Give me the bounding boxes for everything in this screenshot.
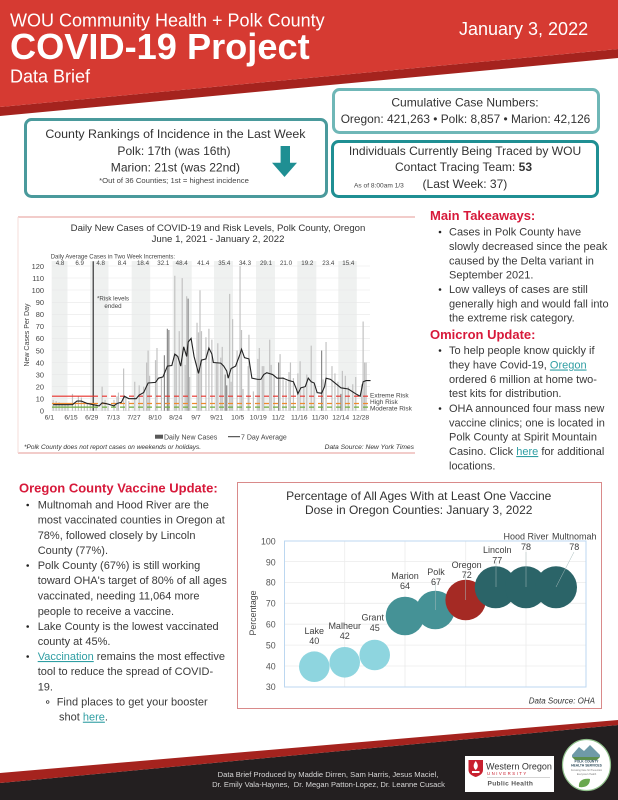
- panel: contact tracing: As of 8:00am 1/3: [354, 183, 404, 190]
- y axis: 120: [32, 262, 44, 271]
- panel: main takeaways: the extreme risk category.: [449, 313, 575, 325]
- panel: oregon county vaccine update: 19.: [38, 682, 53, 694]
- logo: western oregon university public health: UNIVERSITY: [487, 771, 528, 776]
- chart data source: Data Source: New York Times: [325, 444, 415, 451]
- header title block: [10, 11, 325, 87]
- panel: contact tracing: Contact Tracing Team: 53: [395, 160, 532, 174]
- panel: oregon county vaccine update: [19, 480, 227, 724]
- y axis: percentage: 40: [266, 662, 276, 672]
- two week average labels: [51, 254, 355, 267]
- panel: oregon county vaccine update: tool to reduce the spread of COVID-: [38, 666, 214, 678]
- panel: contact tracing: Individuals Currently Being Traced by WOU: [349, 144, 581, 158]
- panel: main takeaways: [430, 208, 609, 472]
- panel: main takeaways: OHA announced four mass new: [449, 403, 604, 415]
- two week average labels: 35.4: [218, 260, 231, 267]
- x axis: 6/15: [64, 414, 78, 421]
- heading: omicron update: Omicron Update:: [430, 327, 535, 342]
- two week average labels: 23.4: [322, 260, 335, 267]
- panel: oregon county vaccine update: toward OHA's target of 80% of all ages: [38, 575, 227, 587]
- x axis: 11/2: [272, 414, 285, 421]
- panel: main takeaways: generally high and would fall into: [449, 298, 609, 310]
- risk level labels: Moderate Risk: [370, 405, 413, 412]
- panel: main takeaways: test kits for distribution.: [449, 388, 562, 400]
- x axis: 9/21: [210, 414, 224, 421]
- panel: oregon county vaccine update: Vaccination remains the most effective: [38, 651, 225, 663]
- panel: cumulative case numbers: [334, 90, 598, 132]
- chart legend: 7 Day Average: [241, 434, 287, 442]
- panel: main takeaways: Low valleys of cases are still: [449, 284, 588, 296]
- panel: main takeaways: Polk County at Spirit Mountain: [449, 432, 597, 444]
- vaccine chart title: Percentage of All Ages With at Least One Vaccine: [286, 489, 552, 503]
- risk level labels: [370, 392, 413, 412]
- bubble labels: Polk: [427, 567, 445, 577]
- logo: polk county health services: HEALTH SERVICES: [571, 764, 603, 768]
- bubble labels: 42: [340, 631, 350, 641]
- logo: polk county health services: [562, 740, 610, 790]
- x axis: 12/14: [332, 414, 349, 421]
- panel: main takeaways: vaccine clinics; one is located in: [449, 417, 605, 429]
- vaccine data source: Data Source: OHA: [529, 696, 595, 706]
- panel: main takeaways: ordered 6 million at home two-: [449, 374, 597, 386]
- x axis: 10/5: [231, 414, 245, 421]
- panel: main takeaways: To help people know quickly if: [449, 345, 595, 357]
- risk level lines: [52, 396, 368, 407]
- panel: contact tracing: [332, 142, 598, 196]
- logo: polk county health services: Everyone's Health: [577, 773, 597, 776]
- x axis: 8/24: [169, 414, 183, 421]
- bubble labels: Hood River: [503, 532, 549, 542]
- panel: oregon county vaccine update: 78%, followed closely by Lincoln: [38, 530, 195, 542]
- two week average labels: 29.1: [260, 260, 273, 267]
- y axis: 60: [36, 334, 44, 343]
- panel: main takeaways: September 2021.: [449, 270, 533, 282]
- bubble labels: Marion: [391, 571, 419, 581]
- y axis: 0: [40, 407, 44, 416]
- panel: main takeaways: Casino. Click here for additional: [449, 446, 604, 458]
- panel: oregon county vaccine update: county at 45%.: [38, 636, 110, 648]
- panel: main takeaways: Cases in Polk County have: [449, 227, 581, 239]
- y axis: 10: [36, 394, 44, 404]
- annotation: risk levels ended: ended: [104, 303, 122, 310]
- chart title: June 1, 2021 - January 2, 2022: [152, 234, 284, 245]
- x axis: 12/28: [352, 414, 369, 421]
- panel: oregon county vaccine update: Find places to get your booster: [57, 697, 208, 709]
- bubbles: [299, 566, 577, 682]
- panel: contact tracing: (Last Week: 37): [422, 177, 507, 191]
- bubble labels: Lincoln: [483, 545, 512, 555]
- logo: western oregon university public health: Public Health: [488, 781, 533, 788]
- y axis: 30: [36, 370, 44, 380]
- bubble labels: 45: [370, 623, 380, 633]
- y axis: 70: [36, 322, 44, 331]
- y axis: 90: [36, 298, 44, 307]
- chart title: [71, 223, 365, 245]
- icon: down arrow: [272, 146, 297, 177]
- bubble labels: 64: [400, 581, 410, 591]
- two week average labels: 8.4: [118, 260, 127, 267]
- y axis: 40: [36, 358, 44, 368]
- two week average labels: 18.4: [137, 260, 150, 267]
- header title block: WOU Community Health + Polk County: [10, 11, 325, 31]
- header banner: [0, 0, 618, 116]
- two week average labels: 41.4: [197, 260, 210, 267]
- bubble labels: 72: [462, 570, 472, 580]
- panel: cumulative case numbers: Oregon: 421,263 • Polk: 8,857 • Marion: 42,126: [341, 112, 591, 126]
- bubble labels: Grant: [361, 612, 384, 622]
- panel: main takeaways: slowly decreased since the peak: [449, 241, 608, 253]
- two week average labels: 4.8: [96, 260, 106, 267]
- panel: oregon county vaccine update: vaccinated, needing 11,064 more: [38, 590, 200, 602]
- two week average labels: 48.4: [176, 260, 188, 267]
- y axis title: percentage: Percentage: [248, 590, 258, 636]
- x axis: 7/13: [107, 414, 120, 421]
- panel: oregon county vaccine update: shot here.: [59, 712, 108, 724]
- chart footnote: *Polk County does not report cases on weekends or holidays.: [24, 444, 201, 451]
- bubble labels: 78: [569, 542, 579, 552]
- y axis: 100: [32, 286, 44, 295]
- bubble labels: Lake: [305, 626, 324, 636]
- x axis: 7/27: [127, 414, 141, 421]
- panel: oregon county vaccine update: County (77%).: [38, 545, 108, 557]
- vaccine chart title: Dose in Oregon Counties: January 3, 2022: [305, 503, 533, 517]
- panel: oregon county vaccine update: people to receive a vaccine.: [38, 606, 174, 618]
- chart title: Daily New Cases of COVID-19 and Risk Levels, Polk County, Oregon: [71, 223, 365, 234]
- x axis: 11/30: [312, 414, 328, 421]
- two week average labels: 15.4: [342, 260, 355, 267]
- logo: polk county health services: Focusing Care for Prevention: [571, 769, 603, 772]
- two week average labels: 34.3: [239, 260, 252, 267]
- panel: county rankings: Polk: 17th (was 16th): [117, 144, 231, 158]
- panel: cumulative case numbers: Cumulative Case Numbers:: [391, 96, 539, 110]
- y axis: 20: [36, 382, 44, 392]
- logo: western oregon university public health: Western Oregon: [486, 761, 552, 771]
- logo: western oregon university public health: [465, 756, 554, 792]
- panel: oregon county vaccine update: Polk County (67%) is still working: [38, 560, 200, 572]
- two week average labels: 19.2: [301, 260, 314, 267]
- report date: January 3, 2022: [459, 19, 588, 39]
- bubble labels: Malheur: [328, 621, 361, 631]
- panel: main takeaways: locations.: [449, 460, 495, 472]
- heading: main takeaways: Main Takeaways:: [430, 208, 535, 223]
- y axis: percentage: 100: [261, 536, 276, 546]
- panel: oregon county vaccine update: Multnomah and Hood River are the: [38, 500, 209, 512]
- panel: main takeaways: they have Covid-19, Oregon: [449, 360, 587, 372]
- y axis: percentage: 50: [266, 640, 276, 650]
- panel: county rankings: Marion: 21st (was 22nd): [111, 161, 240, 175]
- x axis: [45, 414, 369, 421]
- x axis: 6/29: [85, 414, 99, 421]
- x axis: 8/10: [148, 414, 162, 421]
- y axis: 80: [36, 310, 44, 319]
- x axis: 11/16: [291, 414, 308, 421]
- panel: vaccination bubble chart: [238, 482, 602, 708]
- bubble labels: Oregon: [452, 560, 482, 570]
- bubble labels: 77: [492, 556, 502, 566]
- y axis title: New Cases Per Day: [24, 303, 31, 367]
- chart legend: Daily New Cases: [164, 434, 218, 442]
- x axis: 10/19: [250, 414, 267, 421]
- y axis: percentage: 90: [266, 558, 276, 568]
- footer banner: [0, 720, 618, 800]
- two week average labels: 6.9: [75, 260, 85, 267]
- panel: county rankings: *Out of 36 Counties; 1st = highest incidence: [99, 176, 249, 185]
- y axis: percentage: 30: [266, 682, 276, 692]
- panel: county rankings: County Rankings of Incidence in the Last Week: [45, 127, 306, 141]
- heading: vaccine update: Oregon County Vaccine Update:: [19, 480, 218, 495]
- x axis: 9/7: [191, 414, 201, 421]
- bubble labels: Multnomah: [552, 532, 597, 542]
- header title block: Data Brief: [10, 67, 91, 87]
- two week average labels: 21.0: [280, 260, 293, 267]
- risk level labels: High Risk: [370, 399, 399, 406]
- y axis: [32, 262, 44, 416]
- x axis: 6/1: [45, 414, 54, 421]
- two week average labels: 4.8: [56, 260, 65, 267]
- risk level labels: Extreme Risk: [370, 392, 409, 400]
- annotation: risk levels ended: *Risk levels: [97, 296, 129, 303]
- logo: polk county health services: POLK COUNTY: [574, 760, 599, 764]
- y axis: 50: [36, 346, 44, 356]
- footer credits: Dr. Emily Vala-Haynes, Dr. Megan Patton-Lopez, Dr. Leanne Cusack: [212, 780, 445, 789]
- chart legend: [155, 434, 287, 442]
- y axis: percentage: [261, 536, 276, 692]
- y axis: 110: [32, 274, 44, 283]
- panel: oregon county vaccine update: most vaccinated counties in Oregon at: [38, 515, 225, 527]
- bubble labels: 67: [431, 577, 441, 587]
- two week average labels: 32.1: [157, 260, 170, 267]
- vaccine chart title: [286, 489, 552, 517]
- y axis: percentage: 80: [266, 578, 276, 588]
- bubble labels: 78: [521, 542, 531, 552]
- footer credits: Data Brief Produced by Maddie Dirren, Sam Harris, Jesus Maciel,: [218, 770, 438, 779]
- panel: county rankings: [26, 120, 326, 196]
- annotation: risk levels ended: [97, 296, 129, 310]
- header title block: COVID-19 Project: [10, 26, 310, 67]
- footer credits: [212, 770, 445, 789]
- daily case bars: [53, 261, 366, 411]
- panel: oregon county vaccine update: Lake County is the lowest vaccinated: [38, 621, 219, 633]
- panel: main takeaways: caused by the Delta variant in: [449, 255, 594, 267]
- bubble labels: 40: [309, 636, 319, 646]
- panel: daily new cases chart: [18, 217, 415, 453]
- bubble labels: [305, 532, 597, 646]
- y axis: percentage: 60: [266, 620, 276, 630]
- two week average labels: Daily Average Cases in Two Week Increments:: [51, 254, 175, 260]
- seven day average line: [53, 338, 371, 406]
- y axis: percentage: 70: [266, 598, 276, 608]
